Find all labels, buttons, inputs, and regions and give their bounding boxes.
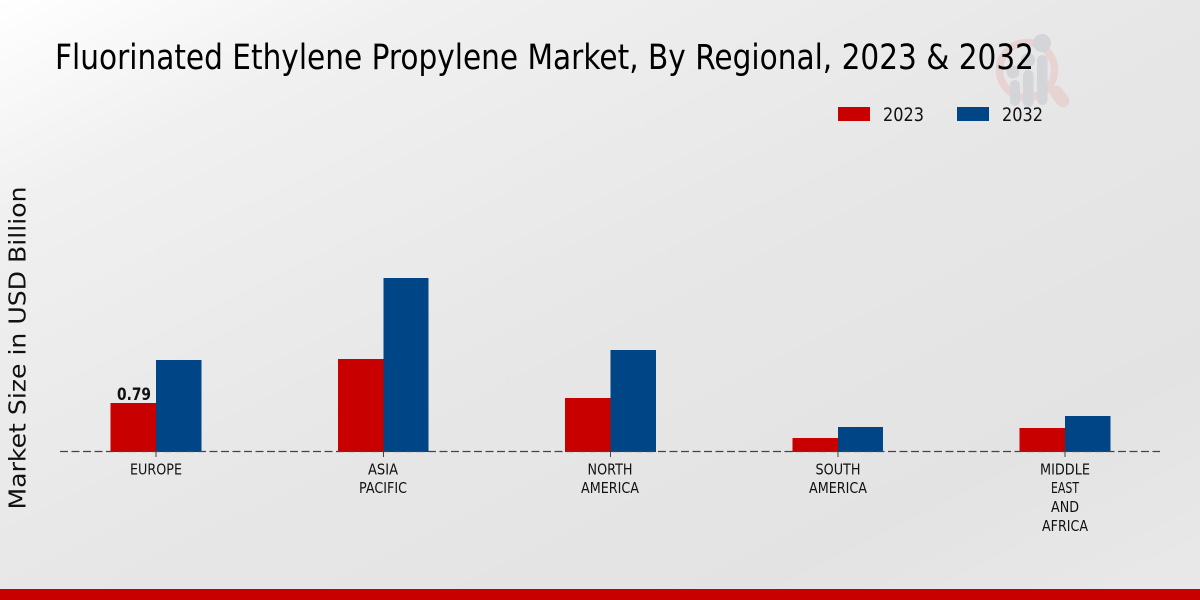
label: South America: SOUTH (816, 460, 860, 478)
label: Middle East and Africa: AFRICA (1042, 517, 1088, 535)
label: Middle East and Africa: EAST (1051, 479, 1079, 497)
bars: Europe (110, 360, 202, 452)
label: Asia Pacific: ASIA (368, 460, 398, 478)
legend item: 2032 (957, 105, 1043, 126)
title: Fluorinated Ethylene Propylene Market, By Regional, 2023 & 2032 (55, 38, 1034, 78)
label: South America: AMERICA (809, 479, 867, 497)
data label: 0.79: 0.79 (117, 385, 151, 405)
bar chart (60, 278, 1160, 457)
label: North America: NORTH (588, 460, 632, 478)
label: Europe: EUROPE (130, 460, 182, 478)
label: Asia Pacific: PACIFIC (359, 479, 407, 497)
label: North America: AMERICA (581, 479, 639, 497)
bars: North America (565, 350, 656, 452)
bars: Middle East and Africa (1020, 416, 1110, 452)
y-axis label: Market Size in USD Billion (6, 186, 32, 510)
bars: Asia Pacific (338, 278, 428, 452)
label: South America (809, 460, 867, 497)
label: North America (581, 460, 639, 497)
legend (838, 105, 1043, 126)
label: Middle East and Africa: AND (1051, 498, 1079, 516)
axis ticks (156, 452, 1065, 457)
icon: watermark logo (1000, 34, 1063, 107)
legend item: 2032: 2032 (1002, 105, 1043, 126)
label: Middle East and Africa: MIDDLE (1040, 460, 1090, 478)
footer bar (0, 589, 1200, 600)
label: Middle East and Africa (1040, 460, 1090, 535)
x-axis labels (130, 460, 1090, 535)
bars: South America (792, 427, 883, 452)
baseline (60, 450, 1160, 452)
label: Asia Pacific (359, 460, 407, 497)
legend item: 2023: 2023 (883, 105, 924, 126)
legend item: 2023 (838, 105, 924, 126)
